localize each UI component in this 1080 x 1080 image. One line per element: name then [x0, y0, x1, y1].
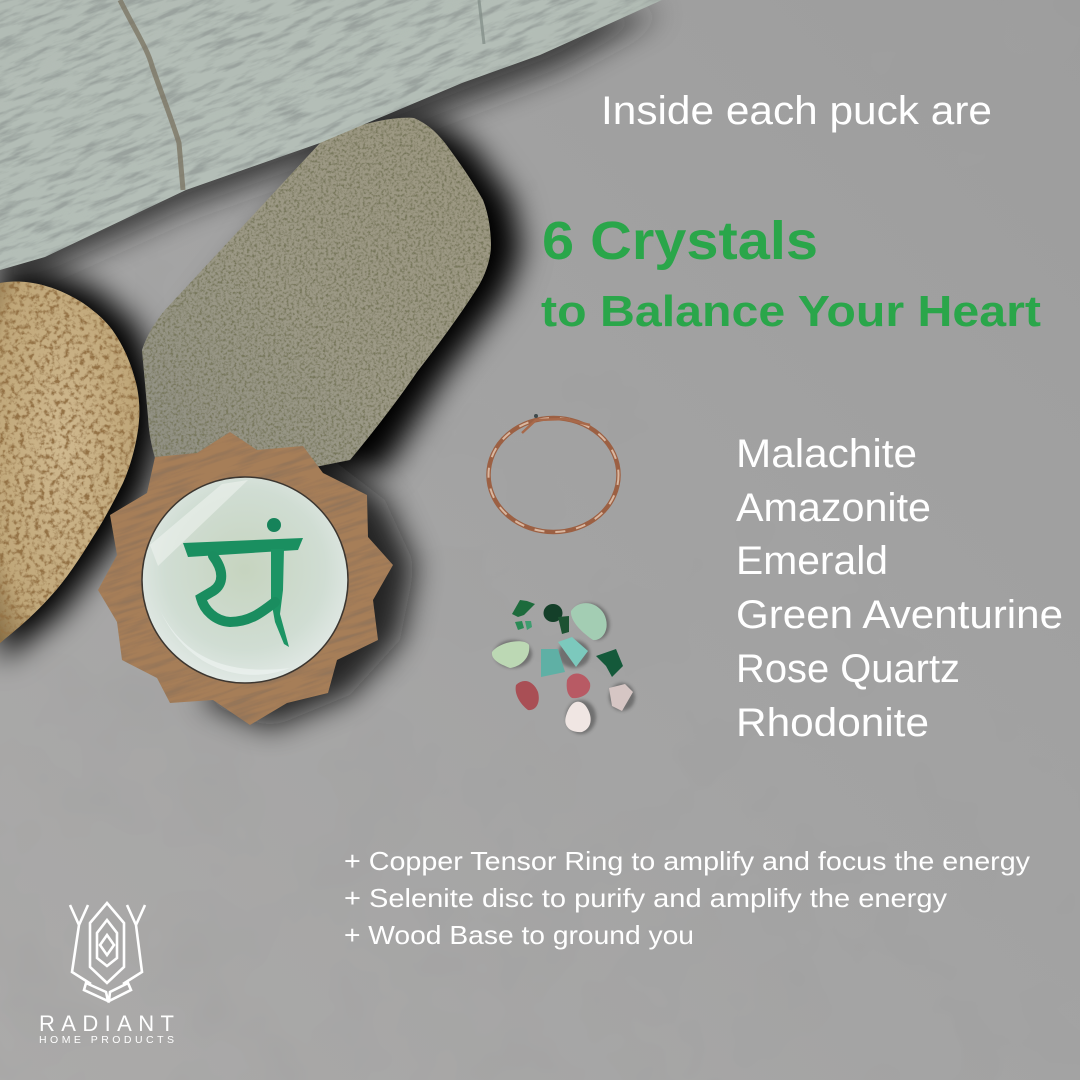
main heading: 6 Crystals — [542, 211, 818, 271]
logo mark — [70, 903, 145, 1001]
wood base — [98, 432, 393, 725]
crystal chips — [492, 600, 635, 734]
components notes: + Selenite disc to purify and amplify the energy — [344, 883, 947, 913]
wordmark: RADIANT — [39, 1011, 174, 1036]
crystal list: Rose Quartz — [736, 647, 960, 691]
chip shadows — [494, 603, 635, 734]
crystal list: Rhodonite — [736, 701, 929, 745]
components notes: + Copper Tensor Ring to amplify and focus the energy — [344, 846, 1030, 876]
crystal list: Emerald — [736, 539, 888, 583]
photo: grey oval stone — [142, 118, 491, 470]
tagline: HOME PRODUCTS — [39, 1034, 174, 1046]
rhodonite and rose quartz — [516, 681, 539, 710]
photo: tan river stone — [0, 282, 139, 643]
crystal list: Green Aventurine — [736, 593, 1063, 637]
crystal list: Amazonite — [736, 486, 931, 530]
components notes: + Wood Base to ground you — [344, 920, 694, 950]
photo: birch log — [0, 0, 662, 270]
crystal list: Malachite — [736, 432, 917, 476]
malachite and emerald chips — [512, 600, 535, 617]
amazonite — [541, 649, 565, 677]
selenite disc — [142, 477, 348, 683]
components notes — [344, 846, 1030, 950]
intro heading: Inside each puck are — [601, 89, 992, 133]
grey stone shadow — [170, 118, 522, 480]
puck shadow — [200, 440, 415, 728]
photo: wood puck with selenite disc — [98, 432, 393, 725]
main heading — [541, 211, 1041, 336]
copper tensor ring — [488, 414, 618, 532]
tan stone shadow — [0, 268, 160, 662]
logo: Radiant Home Products — [39, 903, 174, 1046]
crystal list — [736, 432, 1063, 745]
log shadow — [0, 10, 662, 278]
green aventurine — [571, 603, 607, 640]
main heading: to Balance Your Heart — [541, 287, 1041, 336]
heart chakra symbol — [183, 518, 303, 647]
